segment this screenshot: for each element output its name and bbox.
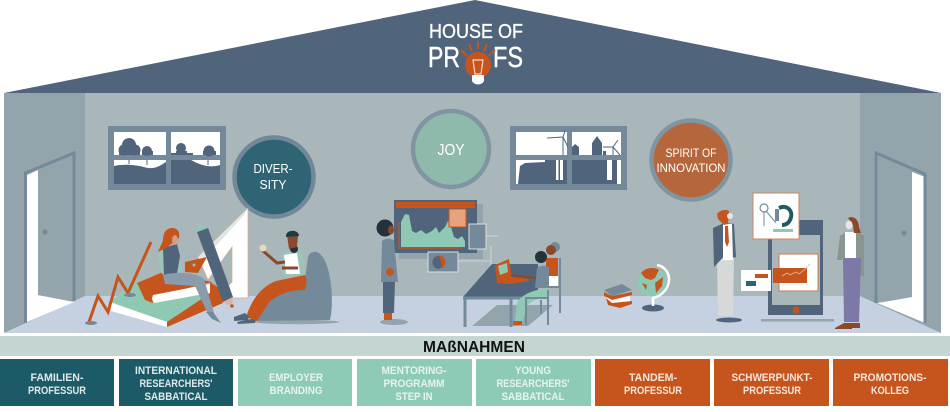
measure: Mentoringprogramm Step In: [357, 359, 472, 406]
stack of books: [604, 284, 632, 308]
measure: Young Researchers' Sabbatical: SABBATICAL: [502, 391, 565, 403]
circle: diversity: [234, 138, 314, 216]
left side wall: [4, 93, 85, 333]
circle: spirit of innovation: INNOVATION: [656, 161, 726, 175]
scene: desk with two people and laptop: [463, 242, 560, 327]
measure: Employer Branding: [238, 359, 352, 406]
window: landscape: [108, 126, 226, 190]
measure: Mentoringprogramm Step In: STEP IN: [396, 391, 433, 403]
circle: spirit of innovation: SPIRIT OF: [666, 146, 716, 160]
circle: spirit of innovation: [652, 120, 730, 200]
measure: Tandemprofessur: TANDEM-: [629, 372, 677, 384]
pencil: [197, 228, 233, 302]
scene: woman on books with chart, ruler and pencil: [85, 208, 248, 327]
scene: phone with screens: [741, 193, 834, 322]
measure: Promotionskolleg: [833, 359, 948, 406]
logo: House of Profs: HOUSE OF: [429, 21, 523, 43]
measure: International Researchers' Sabbatical: SABBATICAL: [144, 391, 208, 403]
roof: [4, 0, 941, 93]
person: [380, 319, 408, 325]
scene: woman with child on beanbag: [234, 231, 339, 324]
right side wall: [860, 93, 941, 333]
measure: Promotionskolleg: PROMOTIONS-: [854, 372, 927, 384]
measure: Mentoringprogramm Step In: PROGRAMM: [384, 378, 444, 390]
measure: Schwerpunktprofessur: [714, 359, 829, 406]
left door: [26, 153, 74, 323]
measure: Young Researchers' Sabbatical: YOUNG: [515, 365, 551, 377]
measure: Familienprofessur: PROFESSUR: [28, 385, 86, 397]
measure: Familienprofessur: FAMILIEN-: [30, 372, 84, 384]
measure: International Researchers' Sabbatical: INTERNATIONAL: [135, 365, 217, 377]
logo: House of Profs: FS: [493, 42, 523, 74]
measure: International Researchers' Sabbatical: [119, 359, 233, 406]
woman: [157, 244, 182, 278]
zigzag arrow: [89, 242, 151, 322]
logo: House of Profs: [428, 21, 523, 84]
circle: diversity: DIVER-: [254, 162, 292, 176]
measure: Schwerpunktprofessur: PROFESSUR: [743, 385, 801, 397]
circle: joy: JOY: [438, 142, 464, 159]
globe: [638, 265, 669, 312]
measure: Young Researchers' Sabbatical: [476, 359, 591, 406]
books: [110, 280, 222, 322]
measure: Promotionskolleg: KOLLEG: [871, 385, 909, 397]
measure: Tandemprofessur: PROFESSUR: [624, 385, 682, 397]
measure: Employer Branding: BRANDING: [270, 385, 322, 397]
measure: Employer Branding: EMPLOYER: [269, 372, 323, 384]
scene: presenter with screen: [376, 200, 498, 325]
band: Maßnahmen: [0, 336, 950, 356]
set square: [198, 208, 248, 298]
right door: [876, 153, 925, 323]
circle: diversity: SITY: [260, 178, 287, 192]
icon: light bulb: [461, 41, 495, 84]
back wall: [85, 93, 860, 298]
measure: Familienprofessur: [0, 359, 114, 406]
logo: House of Profs: PR: [428, 42, 460, 74]
scene: man presenting: [713, 210, 742, 322]
measure: Tandemprofessur: [595, 359, 710, 406]
scene: standing woman: [835, 217, 864, 329]
measure: International Researchers' Sabbatical: RESEARCHERS': [140, 378, 213, 390]
measure: Mentoringprogramm Step In: MENTORING-: [382, 365, 447, 377]
band: Maßnahmen: MAßNAHMEN: [423, 339, 525, 356]
circle: joy: [413, 111, 489, 187]
measure: Young Researchers' Sabbatical: RESEARCHERS': [496, 378, 570, 390]
measure: Schwerpunktprofessur: SCHWERPUNKT-: [732, 372, 813, 384]
window: town with wind turbines: [510, 126, 627, 190]
floor: [4, 296, 941, 333]
